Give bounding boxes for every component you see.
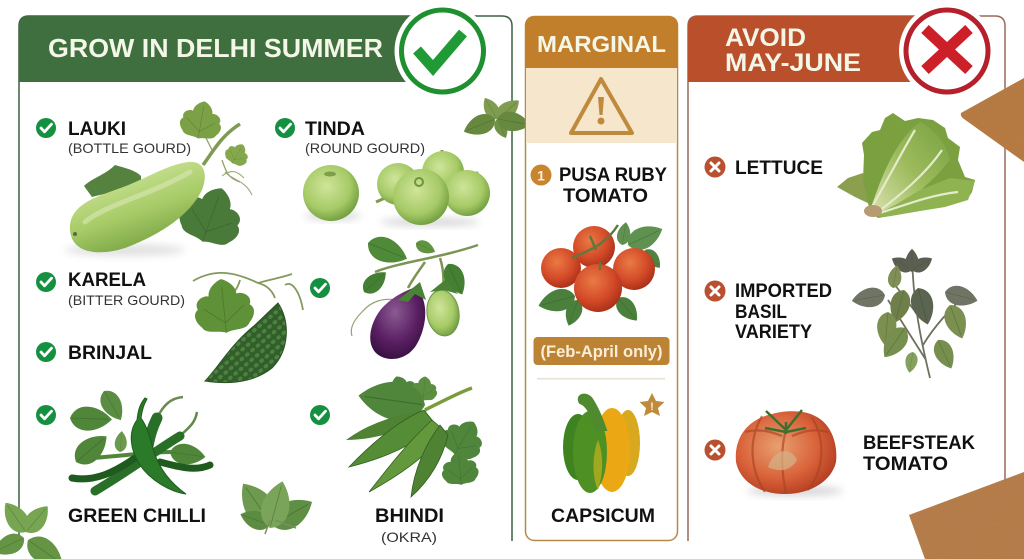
okra illustration [346, 371, 491, 497]
header band [525, 16, 678, 68]
brinjal check icon [310, 278, 330, 298]
bhindi label: BHINDI [375, 506, 444, 527]
icon: red cross badge [899, 3, 995, 99]
chilli label: GREEN CHILLI [68, 506, 206, 527]
coco mat: top right [961, 78, 1024, 162]
tinda sublabel: (ROUND GOURD) [305, 140, 425, 156]
item: beefsteak tomato [704, 410, 975, 496]
cross icon [704, 440, 726, 460]
brinjal illustration [351, 232, 478, 359]
label line 3: VARIETY [735, 322, 812, 343]
label: BEEFSTEAK [863, 433, 975, 454]
icon: warning triangle [571, 79, 632, 133]
header band [19, 16, 410, 82]
item: brinjal [36, 232, 478, 364]
item: karela [36, 270, 303, 383]
panel frame [526, 16, 678, 540]
heading: GROW IN DELHI SUMMER [48, 33, 383, 63]
item: capsicum [551, 393, 664, 527]
karela illustration [191, 273, 303, 383]
label: PUSA RUBY [559, 165, 667, 186]
panel: grow in Delhi summer [19, 3, 512, 545]
karela label: KARELA [68, 270, 146, 291]
icon: green check badge [394, 3, 490, 99]
brinjal label: BRINJAL [68, 343, 152, 364]
note pill: (Feb-April only) [540, 342, 662, 361]
basil plant illustration [850, 249, 980, 378]
heading: AVOID [725, 24, 806, 52]
label: LETTUCE [735, 158, 823, 179]
decorative basil sprig: bottom left [0, 497, 69, 559]
note pill [534, 337, 670, 365]
item: imported basil [704, 249, 980, 378]
decorative basil sprig: centre [231, 475, 319, 536]
panel frame [688, 16, 1005, 541]
heading: MARGINAL [537, 31, 666, 57]
numbered badge [530, 164, 552, 186]
item: lettuce [704, 113, 975, 218]
item: pusa ruby tomato [530, 164, 670, 365]
numbered badge: 1 [537, 168, 545, 184]
cross icon [704, 280, 726, 302]
label line 2: TOMATO [563, 186, 648, 207]
decorative basil sprig: top right of green panel [460, 94, 532, 141]
item: lauki [36, 98, 253, 256]
tomato illustration [536, 219, 667, 328]
karela sublabel: (BITTER GOURD) [68, 292, 185, 308]
divider [537, 378, 665, 380]
check icon [36, 118, 56, 138]
icon: warning star: ! [650, 401, 654, 413]
check icon [36, 405, 56, 425]
item: bhindi [310, 371, 491, 545]
tinda label: TINDA [305, 119, 365, 140]
coco mat: bottom right [909, 472, 1024, 559]
lettuce illustration [837, 113, 975, 218]
panel: avoid may-june [688, 3, 1005, 541]
lauki label: LAUKI [68, 119, 126, 140]
cross icon [704, 156, 726, 178]
label line 2: TOMATO [863, 454, 948, 475]
item: tinda [275, 118, 490, 226]
label: CAPSICUM [551, 506, 655, 527]
label: IMPORTED [735, 281, 832, 302]
tinda illustration [303, 150, 490, 226]
check icon [36, 342, 56, 362]
panel frame [19, 16, 512, 541]
header band [688, 16, 920, 82]
lauki illustration [65, 98, 253, 256]
capsicum illustration [563, 395, 640, 493]
beige band [526, 67, 677, 143]
beefsteak illustration [736, 410, 843, 496]
heading line 2: MAY-JUNE [725, 49, 861, 77]
item: green chilli [36, 386, 210, 527]
bhindi sublabel: (OKRA) [381, 529, 437, 545]
check icon [275, 118, 295, 138]
chilli illustration [69, 386, 210, 494]
panel: marginal [525, 16, 678, 540]
lauki sublabel: (BOTTLE GOURD) [68, 140, 191, 156]
label line 2: BASIL [735, 302, 787, 323]
check icon [310, 405, 330, 425]
check icon [36, 272, 56, 292]
